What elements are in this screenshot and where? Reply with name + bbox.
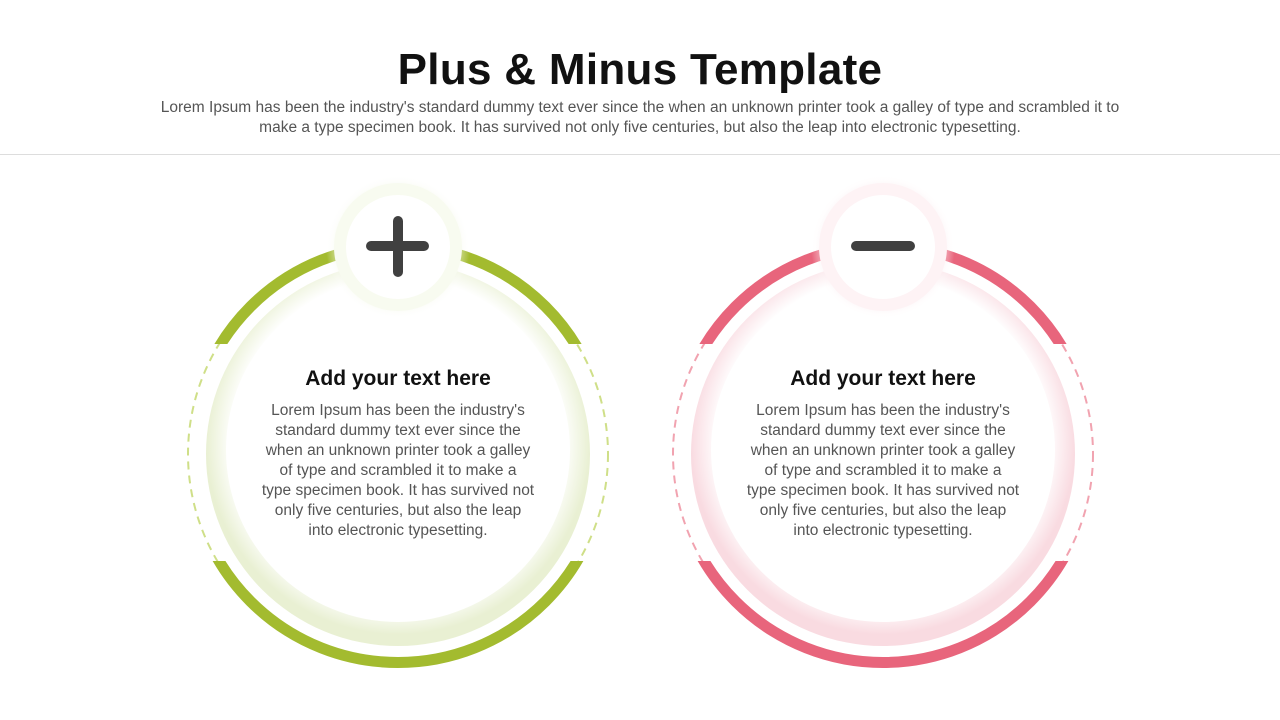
icon: plus xyxy=(371,221,424,272)
subtitle: Lorem Ipsum has been the industry's standard dummy text ever since the when an unknown printer took a galley of type and scrambled it to xyxy=(161,99,1119,116)
panel: minus xyxy=(673,175,1093,664)
text: minus: when an unknown printer took a galley xyxy=(751,442,1015,459)
text: minus: of type and scrambled it to make a xyxy=(765,462,1001,479)
diagram xyxy=(187,183,1094,668)
icon: minus xyxy=(856,241,910,251)
text: plus: type specimen book. It has survived not xyxy=(262,482,534,499)
text: plus: Lorem Ipsum has been the industry's xyxy=(271,402,525,419)
text: minus: only five centuries, but also the leap xyxy=(760,502,1006,519)
text: minus: type specimen book. It has survived not xyxy=(747,482,1019,499)
subtitle: make a type specimen book. It has survived not only five centuries, but also the leap into electronic typesetting. xyxy=(259,119,1021,136)
text: plus: standard dummy text ever since the xyxy=(275,422,521,439)
divider xyxy=(0,154,1280,155)
text: plus xyxy=(262,367,534,539)
text: minus: Add your text here xyxy=(790,367,976,390)
text: minus: into electronic typesetting. xyxy=(793,522,973,539)
text: plus: Add your text here xyxy=(305,367,491,390)
text: minus: Lorem Ipsum has been the industry's xyxy=(756,402,1010,419)
text: minus xyxy=(747,367,1019,539)
text: plus: only five centuries, but also the leap xyxy=(275,502,521,519)
subtitle xyxy=(161,99,1119,136)
text: plus: of type and scrambled it to make a xyxy=(280,462,516,479)
panel: plus xyxy=(188,175,608,664)
text: minus: standard dummy text ever since the xyxy=(760,422,1006,439)
title: Plus & Minus Template xyxy=(398,45,882,94)
text: plus: when an unknown printer took a galley xyxy=(266,442,530,459)
text: plus: into electronic typesetting. xyxy=(308,522,488,539)
